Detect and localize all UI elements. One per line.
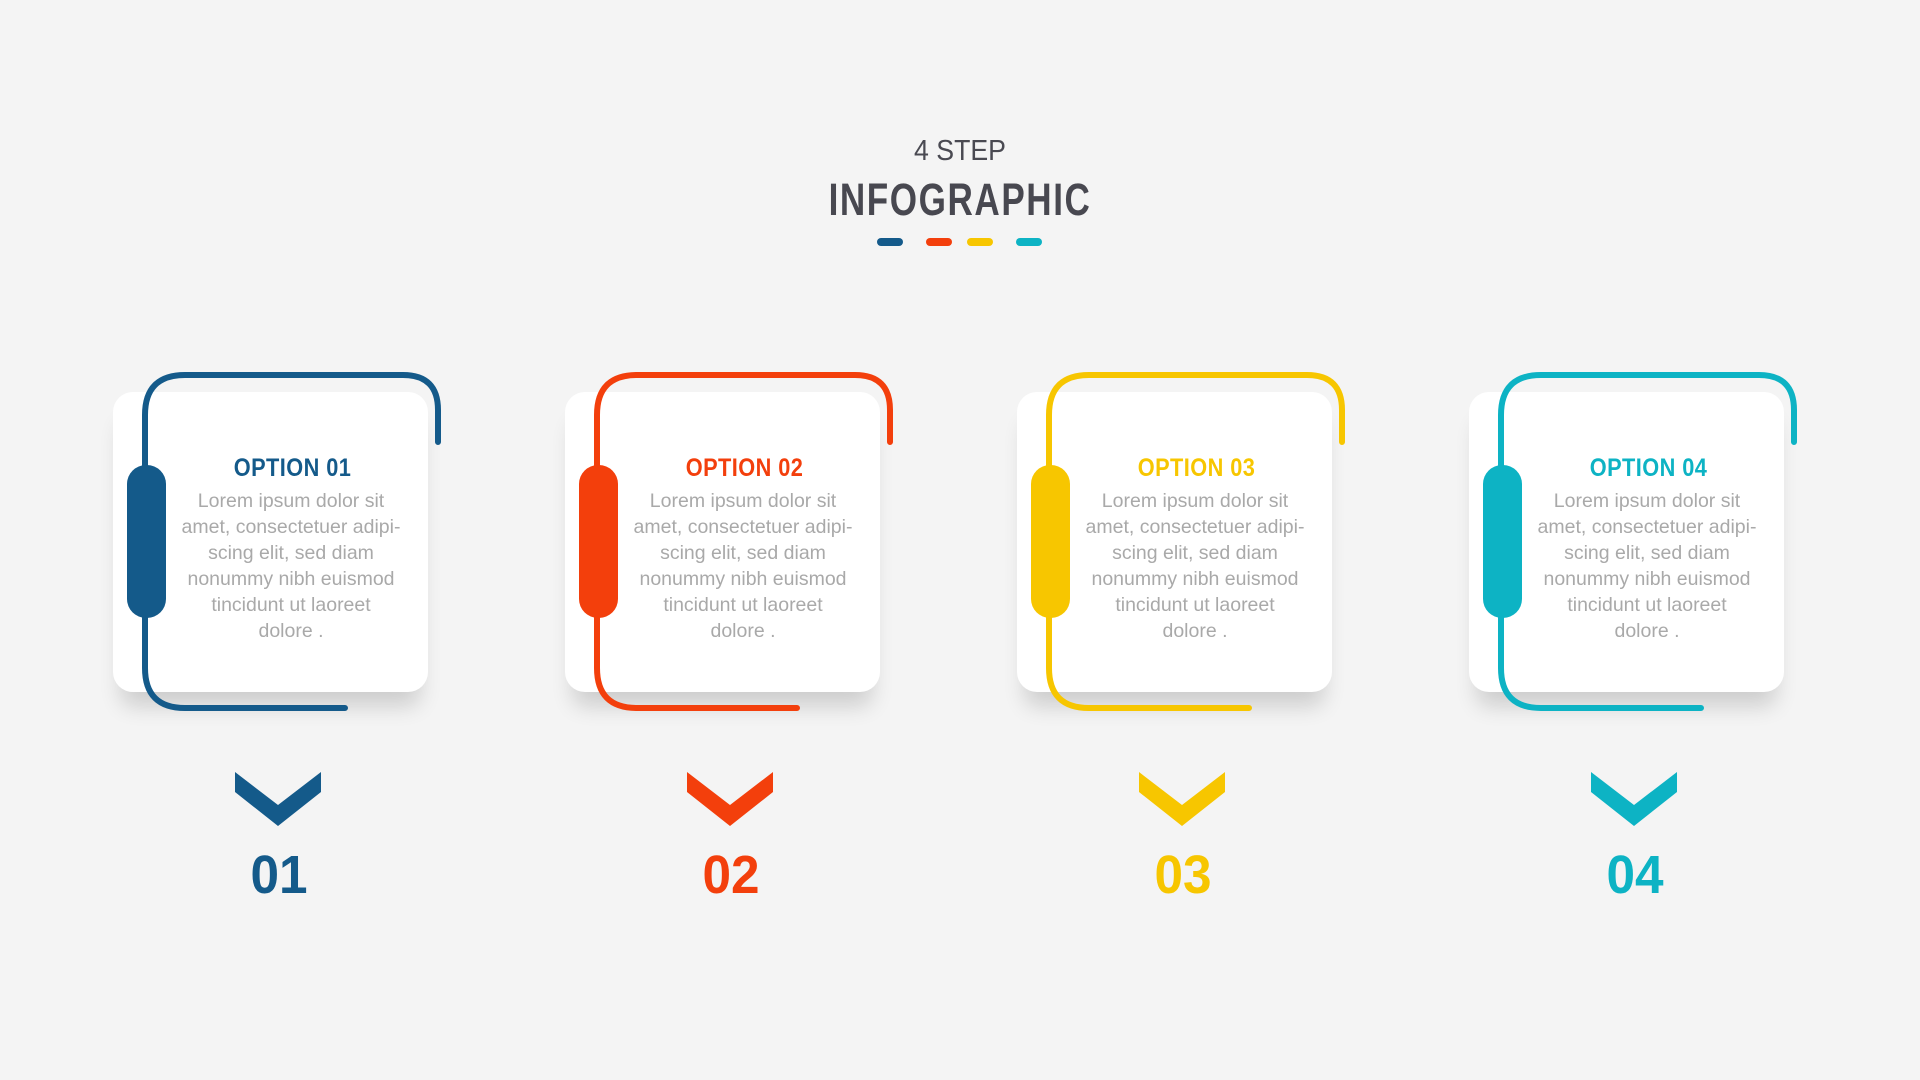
heading: OPTION 02 xyxy=(686,454,803,482)
text block: scing elit, sed diam xyxy=(660,542,826,564)
text block: nonummy nibh euismod xyxy=(639,568,847,590)
text block xyxy=(182,490,400,642)
panel: option 01 xyxy=(112,372,441,905)
text block: nonummy nibh euismod xyxy=(1543,568,1751,590)
outline frame xyxy=(1483,372,1797,826)
text block: Lorem ipsum dolor sit xyxy=(1102,490,1288,512)
title: infographic: INFOGRAPHIC xyxy=(829,174,1091,225)
panel: option 04 xyxy=(1468,372,1797,905)
text block: amet, consectetuer adipi- xyxy=(1538,516,1756,538)
number: 04 xyxy=(1606,845,1664,905)
text block: nonummy nibh euismod xyxy=(187,568,395,590)
text block: amet, consectetuer adipi- xyxy=(182,516,400,538)
panel: option 02 xyxy=(564,372,893,905)
number: 02 xyxy=(702,845,760,905)
text block: nonummy nibh euismod xyxy=(1091,568,1299,590)
outline frame xyxy=(579,372,893,826)
text block: amet, consectetuer adipi- xyxy=(634,516,852,538)
text block xyxy=(1538,490,1756,642)
text block: scing elit, sed diam xyxy=(208,542,374,564)
panel: option 03 xyxy=(1016,372,1345,905)
color dashes xyxy=(877,238,1042,246)
number: 03 xyxy=(1154,845,1212,905)
text block: scing elit, sed diam xyxy=(1112,542,1278,564)
text block: Lorem ipsum dolor sit xyxy=(650,490,836,512)
title: 4 step: 4 STEP xyxy=(914,135,1006,167)
text block: scing elit, sed diam xyxy=(1564,542,1730,564)
text block: dolore . xyxy=(258,620,324,642)
text block: tincidunt ut laoreet xyxy=(211,594,371,616)
text block xyxy=(1086,490,1304,642)
heading: OPTION 01 xyxy=(234,454,351,482)
text block: dolore . xyxy=(1162,620,1228,642)
heading: OPTION 03 xyxy=(1138,454,1255,482)
text block: Lorem ipsum dolor sit xyxy=(1554,490,1740,512)
heading: OPTION 04 xyxy=(1590,454,1707,482)
text block: Lorem ipsum dolor sit xyxy=(198,490,384,512)
text block xyxy=(634,490,852,642)
text block: tincidunt ut laoreet xyxy=(1567,594,1727,616)
text block: tincidunt ut laoreet xyxy=(1115,594,1275,616)
text block: dolore . xyxy=(1614,620,1680,642)
outline frame xyxy=(1031,372,1345,826)
text block: amet, consectetuer adipi- xyxy=(1086,516,1304,538)
text block: dolore . xyxy=(710,620,776,642)
text block: tincidunt ut laoreet xyxy=(663,594,823,616)
outline frame xyxy=(127,372,441,826)
number: 01 xyxy=(250,845,308,905)
